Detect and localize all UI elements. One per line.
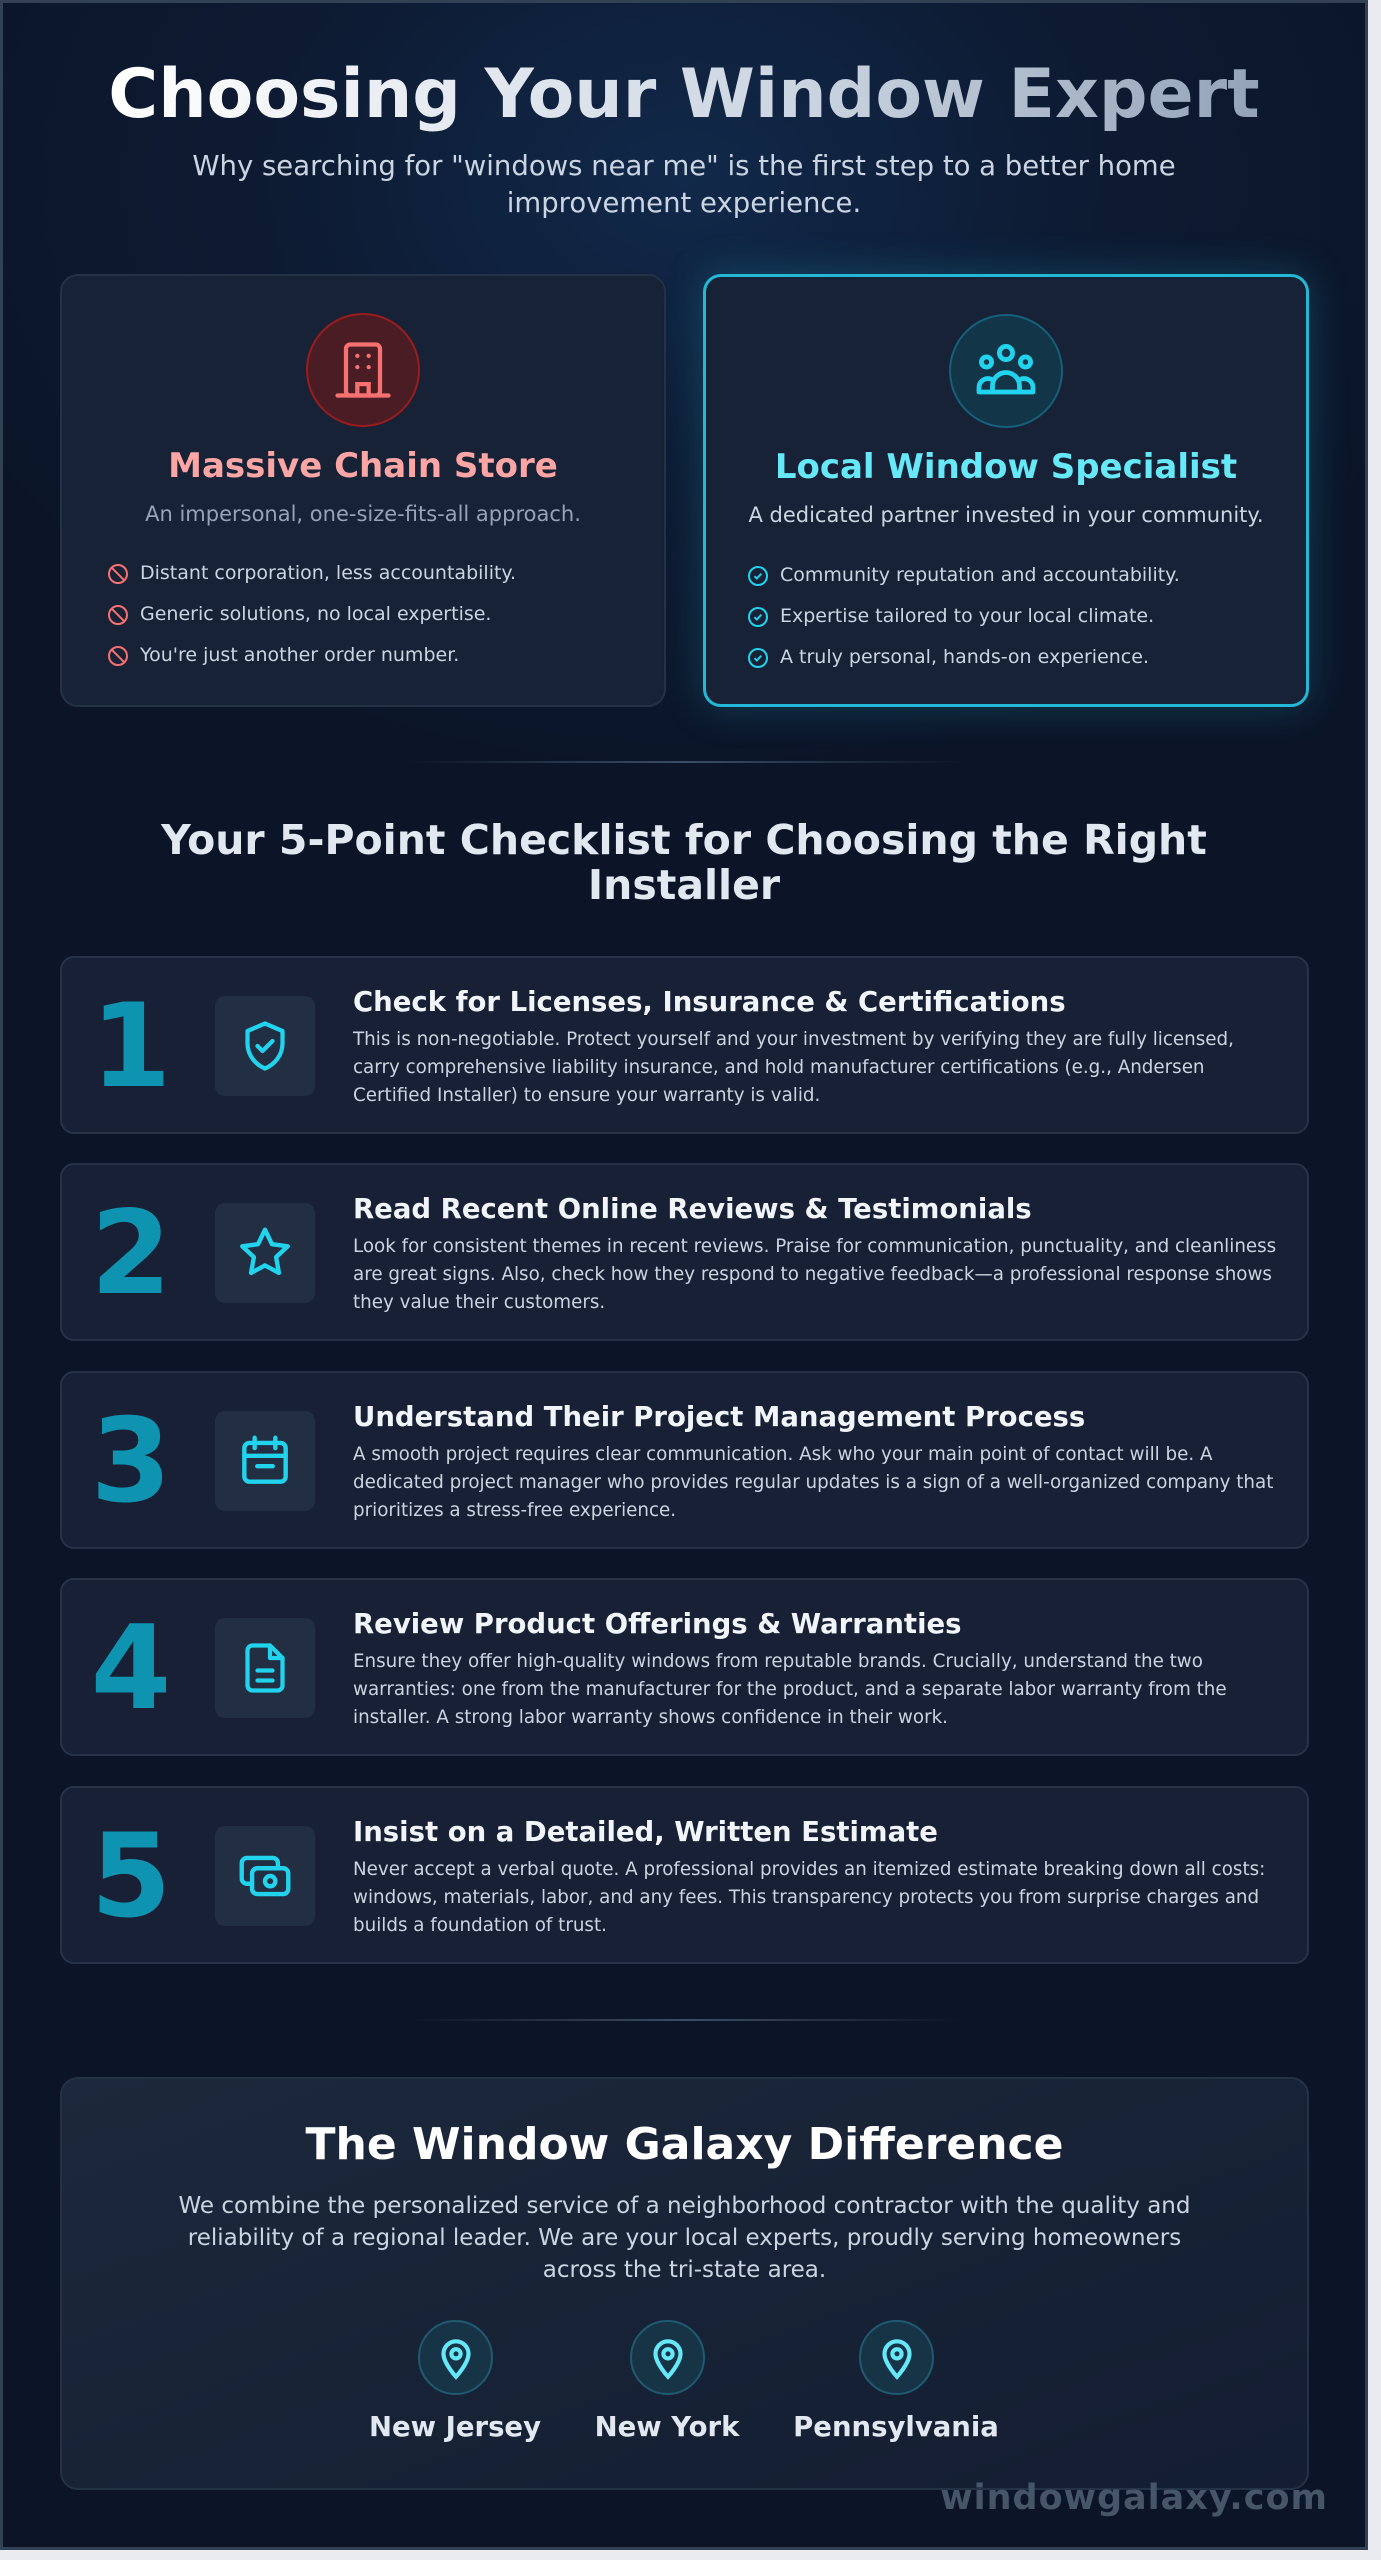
card subtitle: An impersonal, one-size-fits-all approach. — [145, 502, 581, 526]
checklist item 1: 1 — [91, 979, 171, 1114]
label: New Jersey: New Jersey — [369, 2411, 541, 2443]
icon: money — [215, 1826, 315, 1926]
card title: Massive Chain Store — [168, 446, 558, 486]
card title: Local Window Specialist — [775, 447, 1237, 487]
checklist item 2 — [60, 1163, 1309, 1341]
list: negatives: You're just another order number. — [140, 644, 459, 666]
icon: shield — [215, 996, 315, 1096]
panel: local specialist — [703, 274, 1309, 707]
checklist item 4: Ensure they offer high-quality windows from reputable brands. Crucially, understand the two warranties: one from the manufacturer for the product, and a separate labor warranty from the installer. A strong labor warranty shows confidence in their work. — [353, 1651, 1227, 1728]
list: positives: Community reputation and accountability. — [780, 564, 1180, 586]
icon: star — [215, 1203, 315, 1303]
checklist item 1: This is non-negotiable. Protect yourself and your investment by verifying they are fully licensed, carry comprehensive liability insurance, and hold manufacturer certifications (e.g., Andersen Certified Installer) to ensure your warranty is valid. — [353, 1029, 1234, 1106]
watermark: windowgalaxy.com — [940, 2478, 1328, 2518]
list: positives: A truly personal, hands-on experience. — [780, 646, 1149, 668]
checklist item 4: 4 — [91, 1601, 171, 1736]
checklist item 4 — [60, 1578, 1309, 1756]
checklist item 3: 3 — [91, 1394, 171, 1529]
icon: pin NY — [630, 2320, 705, 2395]
icon: pin NJ — [418, 2320, 493, 2395]
checklist item 2: Look for consistent themes in recent reviews. Praise for communication, punctuality, and cleanliness are great signs. Also, check how they respond to negative feedback—a professional response shows they value their customers. — [353, 1236, 1276, 1313]
checklist item 1 — [60, 956, 1309, 1134]
list: positives — [748, 564, 1180, 668]
checklist item 5: Insist on a Detailed, Written Estimate — [353, 1816, 938, 1848]
checklist item 5 — [60, 1786, 1309, 1964]
icon: document — [215, 1618, 315, 1718]
paragraph: We combine the personalized service of a neighborhood contractor with the quality and reliability of a regional leader. We are your local experts, proudly serving homeowners across the tri-state area. — [179, 2193, 1190, 2283]
heading: The Window Galaxy Difference — [306, 2119, 1063, 2170]
icon: calendar — [215, 1411, 315, 1511]
checklist item 5: Never accept a verbal quote. A professional provides an itemized estimate breaking down all costs: windows, materials, labor, and any fees. This transparency protects you from surprise charges and builds a foundation of trust. — [353, 1859, 1265, 1936]
card subtitle: A dedicated partner invested in your community. — [748, 503, 1264, 527]
checklist item 3 — [60, 1371, 1309, 1549]
checklist item 2: Read Recent Online Reviews & Testimonials — [353, 1193, 1032, 1225]
checklist item 4: Review Product Offerings & Warranties — [353, 1608, 962, 1640]
icon: pin PA — [859, 2320, 934, 2395]
panel: chain store — [60, 274, 666, 707]
icon: building — [306, 313, 420, 427]
list: negatives: Generic solutions, no local expertise. — [140, 603, 491, 625]
panel: window galaxy difference — [60, 2077, 1309, 2490]
icon: people — [949, 314, 1063, 428]
checklist item 5: 5 — [91, 1809, 171, 1944]
label: New York: New York — [595, 2411, 739, 2443]
list: negatives: Distant corporation, less accountability. — [140, 562, 516, 584]
list: positives: Expertise tailored to your local climate. — [780, 605, 1154, 627]
title: Choosing Your Window Expert — [108, 55, 1260, 134]
subtitle: Why searching for "windows near me" is the first step to a better home improvement experience. — [192, 150, 1176, 219]
label: Pennsylvania: Pennsylvania — [793, 2411, 999, 2443]
checklist item 1: Check for Licenses, Insurance & Certifications — [353, 986, 1066, 1018]
list: negatives — [108, 562, 516, 666]
checklist item 2: 2 — [91, 1186, 171, 1321]
checklist item 3: A smooth project requires clear communication. Ask who your main point of contact will be. A dedicated project manager who provides regular updates is a sign of a well-organized company that prioritizes a stress-free experience. — [353, 1444, 1273, 1521]
checklist heading: Your 5-Point Checklist for Choosing the Right Installer — [161, 816, 1207, 909]
checklist item 3: Understand Their Project Management Process — [353, 1401, 1085, 1433]
